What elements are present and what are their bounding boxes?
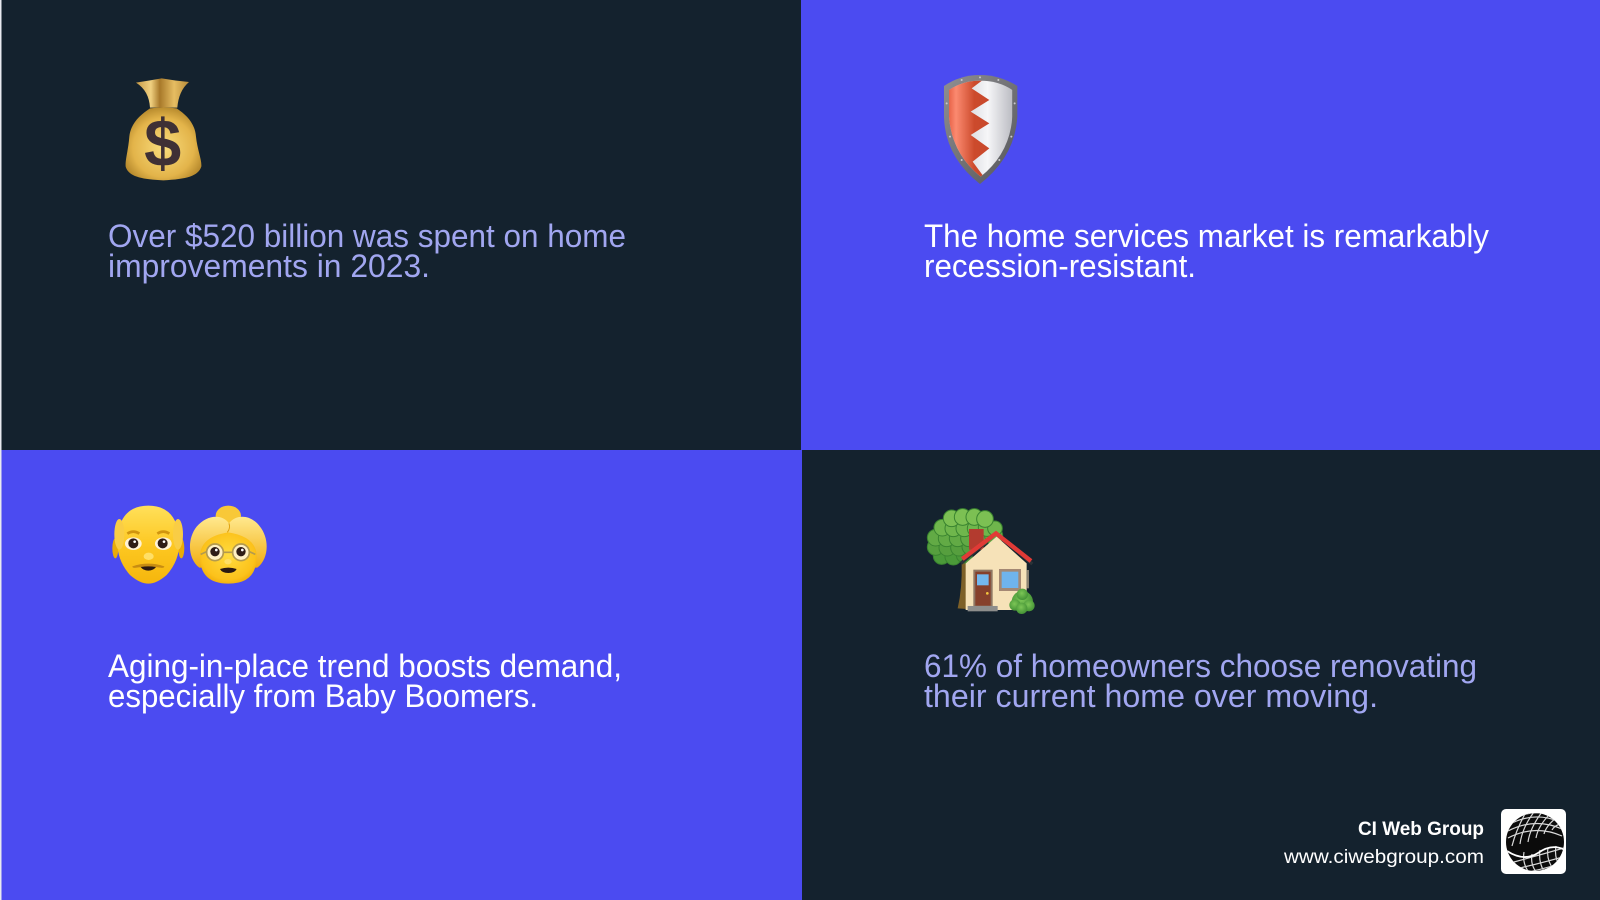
icon: shield xyxy=(944,75,1017,184)
text: renovation fact: their current home over moving. xyxy=(924,678,1378,714)
text: aging fact: especially from Baby Boomers. xyxy=(108,678,538,714)
text: renovation fact xyxy=(924,648,1477,714)
brand name: CI Web Group xyxy=(1358,819,1484,840)
panel: recession resistance xyxy=(801,0,1600,450)
text: recession fact xyxy=(924,218,1489,284)
text: renovation fact: 61% of homeowners choose renovating xyxy=(924,648,1477,684)
icon: money bag xyxy=(126,78,201,181)
icon: older man and older woman xyxy=(112,506,267,584)
left edge strip xyxy=(0,0,2,900)
panel: aging in place xyxy=(0,450,802,900)
text: aging fact xyxy=(108,648,622,714)
panel: home improvement spending xyxy=(0,0,801,450)
text: recession fact: recession-resistant. xyxy=(924,248,1196,284)
icon: money bag: $ xyxy=(144,107,181,181)
text: spending fact: Over $520 billion was spent on home xyxy=(108,218,626,254)
text: recession fact: The home services market is remarkably xyxy=(924,218,1489,254)
icon: house with tree xyxy=(927,509,1035,614)
text: aging fact: Aging-in-place trend boosts demand, xyxy=(108,648,622,684)
website address: www.ciwebgroup.com xyxy=(1283,847,1484,868)
text: spending fact xyxy=(108,218,626,284)
panel: renovating preference xyxy=(924,508,1566,874)
text: spending fact: improvements in 2023. xyxy=(108,248,430,284)
logo: globe badge xyxy=(1501,809,1566,874)
